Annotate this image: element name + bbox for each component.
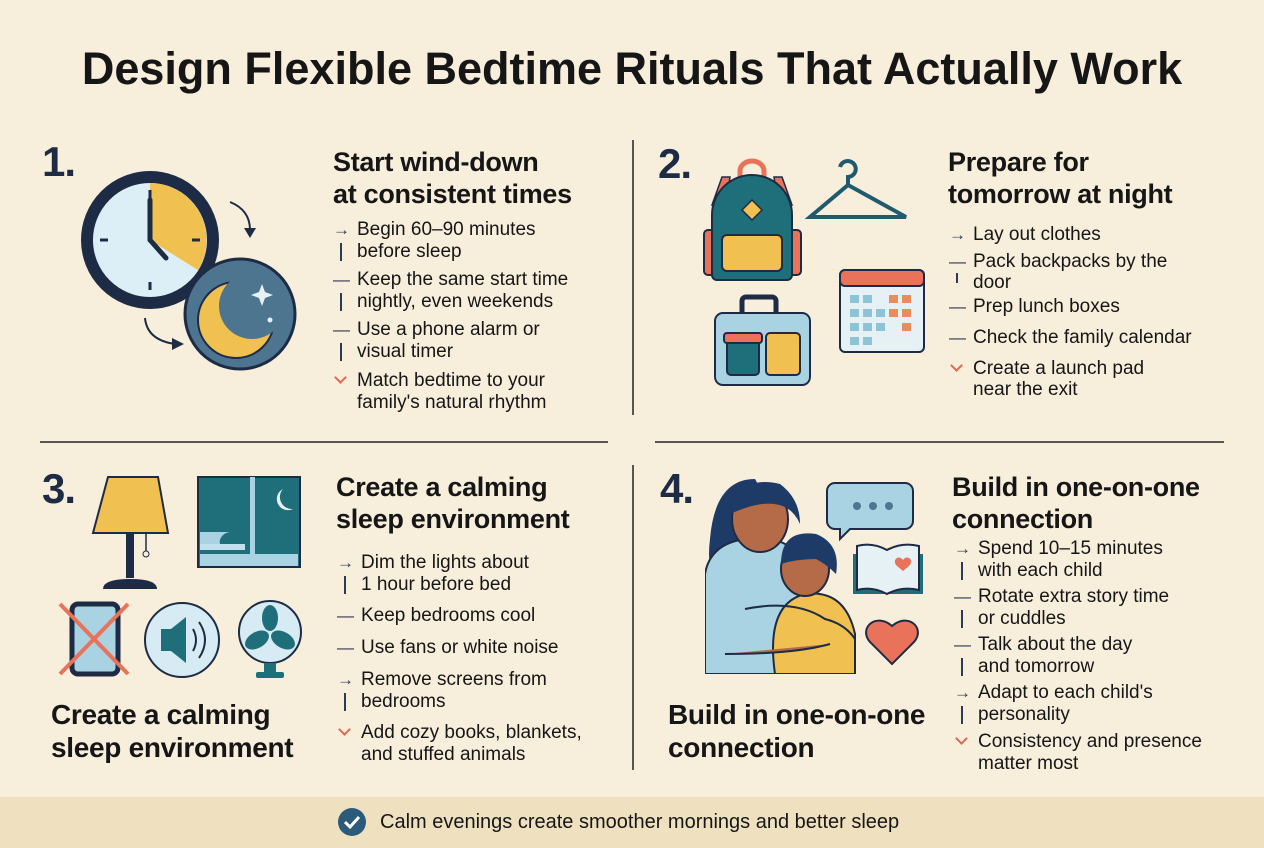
bullets 2: near the exit: [973, 379, 1078, 400]
icon: check circle: [338, 808, 366, 836]
bullets 4: →: [954, 683, 971, 702]
bullets 3: —: [337, 606, 354, 625]
bullets 4: —: [954, 635, 971, 654]
bullets 4: personality: [978, 704, 1070, 725]
bullets 3: bedrooms: [361, 691, 446, 712]
bullets 4: Rotate extra story time: [978, 586, 1169, 607]
bullets 2: Check the family calendar: [973, 327, 1192, 348]
icon: backpack, hanger, lunchbox, calendar: [703, 158, 925, 386]
bullets 1: —: [333, 270, 350, 289]
bullets 2: —: [949, 297, 966, 316]
bullets 1: Keep the same start time: [357, 269, 568, 290]
heading 2: tomorrow at night: [948, 179, 1172, 209]
bullets 1: before sleep: [357, 241, 462, 262]
bullets 1: Use a phone alarm or: [357, 319, 540, 340]
bullets 4: matter most: [978, 753, 1078, 774]
heading 4 bottom: Build in one-on-one: [668, 699, 925, 730]
bullets 4: with each child: [978, 560, 1103, 581]
bullets 4: →: [954, 539, 971, 558]
footer banner: [0, 797, 1264, 848]
footer text: Calm evenings create smoother mornings and better sleep: [380, 811, 899, 833]
bullets 2: —: [949, 252, 966, 271]
bullets 1: visual timer: [357, 341, 453, 362]
bullets 3: Add cozy books, blankets,: [361, 722, 582, 743]
bullets 4: —: [954, 587, 971, 606]
bullets 2: [949, 224, 1192, 400]
bullets 3: 1 hour before bed: [361, 574, 511, 595]
heading 2: [948, 147, 1172, 209]
heading 3 bottom: sleep environment: [51, 732, 293, 763]
bullets 4: Talk about the day: [978, 634, 1132, 655]
bullets 4: or cuddles: [978, 608, 1066, 629]
bullets 3: —: [337, 638, 354, 657]
bullets 2: Lay out clothes: [973, 224, 1101, 245]
heading 1: at consistent times: [333, 179, 572, 209]
bullets 2: Create a launch pad: [973, 358, 1144, 379]
bullets 3: Dim the lights about: [361, 552, 529, 573]
icon: clock and moon: [81, 171, 296, 370]
bullets 2: door: [973, 272, 1011, 293]
panel 2: prepare for tomorrow: [658, 140, 1192, 400]
heading 1: Start wind-down: [333, 147, 538, 177]
bullets 1: Begin 60–90 minutes: [357, 219, 536, 240]
number 1: 1.: [42, 138, 75, 185]
heading 3: Create a calming: [336, 472, 547, 502]
bullets 1: →: [333, 220, 350, 239]
bullets 4: Consistency and presence: [978, 731, 1202, 752]
heading 4: [952, 472, 1200, 534]
bullets 2: —: [949, 328, 966, 347]
bullets 1: family's natural rhythm: [357, 392, 546, 413]
bullets 4: and tomorrow: [978, 656, 1094, 677]
bullets 1: nightly, even weekends: [357, 291, 553, 312]
heading 4: connection: [952, 504, 1093, 534]
heading 3 bottom: Create a calming: [51, 699, 270, 730]
heading 3 bottom: [51, 699, 294, 763]
bullets 3: Remove screens from: [361, 669, 547, 690]
heading 4 bottom: [668, 699, 925, 763]
heading 4: Build in one-on-one: [952, 472, 1200, 502]
panel 1: wind-down: [42, 138, 572, 413]
number 2: 2.: [658, 140, 691, 187]
bullets 2: Prep lunch boxes: [973, 296, 1120, 317]
title: Design Flexible Bedtime Rituals That Actually Work: [82, 43, 1182, 94]
bullets 3: Use fans or white noise: [361, 637, 558, 658]
bullets 2: →: [949, 225, 966, 244]
heading 1: [333, 147, 572, 209]
heading 3: [336, 472, 570, 534]
bullets 4: Adapt to each child's: [978, 682, 1153, 703]
bullets 3: and stuffed animals: [361, 744, 525, 765]
heading 2: Prepare for: [948, 147, 1089, 177]
bullets 3: [337, 552, 582, 765]
bullets 1: Match bedtime to your: [357, 370, 545, 391]
bullets 3: →: [337, 670, 354, 689]
heading 4 bottom: connection: [668, 732, 814, 763]
panel 4: one-on-one connection: [660, 465, 1202, 774]
bullets 2: Pack backpacks by the: [973, 251, 1167, 272]
dividers: [632, 140, 634, 415]
bullets 3: →: [337, 553, 354, 572]
panel 3: calming environment: [42, 465, 582, 765]
illustration: parent hugging child, speech bubble, book, heart: [705, 479, 923, 674]
number 4: 4.: [660, 465, 693, 512]
bullets 4: Spend 10–15 minutes: [978, 538, 1163, 559]
icon: lamp, window, tablet, speaker, fan: [58, 476, 302, 678]
bullets 1: —: [333, 320, 350, 339]
bullets 1: [333, 219, 568, 413]
bullets 3: Keep bedrooms cool: [361, 605, 535, 626]
heading 3: sleep environment: [336, 504, 569, 534]
number 3: 3.: [42, 465, 75, 512]
bullets 4: [954, 538, 1202, 774]
